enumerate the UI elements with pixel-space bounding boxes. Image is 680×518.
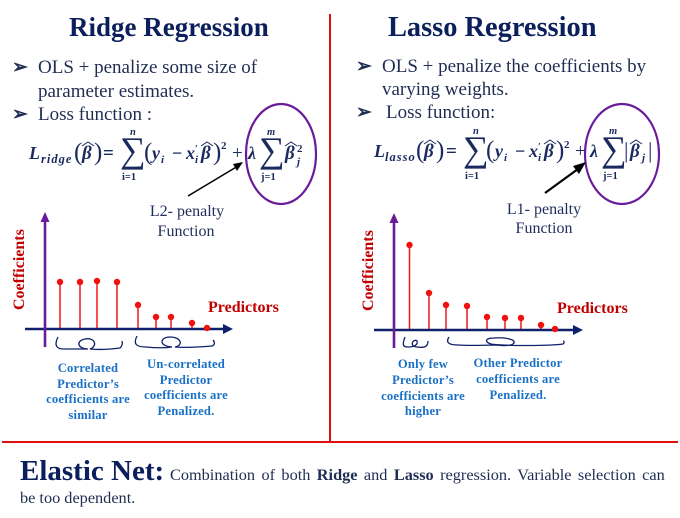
formula: ridge loss: i [195, 154, 199, 166]
divider: vertical red line [329, 14, 331, 441]
formula: lasso loss: L [373, 141, 385, 161]
caption: uncorrelated predictors: Un-correlated [147, 357, 225, 371]
formula: lasso loss: ( [486, 137, 494, 164]
text block: ridge bullets: parameter estimates. [38, 81, 194, 102]
formula: ridge loss: ( [74, 139, 82, 166]
formula: ridge loss: y [150, 143, 161, 163]
callout circle: L2 penalty term [246, 104, 316, 204]
formula: ridge loss: j=1 [260, 172, 276, 183]
text block: lasso bullets: Loss function: [386, 102, 495, 123]
formula: ridge loss: L [28, 143, 40, 163]
formula: ridge loss: ′ [195, 144, 198, 155]
caption: uncorrelated predictors [144, 357, 228, 418]
caption: few predictors higher: Predictor’s [392, 373, 454, 387]
formula: lasso loss: β [629, 141, 640, 162]
text block: L1 penalty function: L1- penalty [507, 201, 581, 218]
text block: L2 penalty function: L2- penalty [150, 203, 224, 220]
x axis: predictors [25, 324, 233, 334]
text block: L2 penalty function [150, 203, 224, 240]
formula: ridge loss: m [267, 127, 275, 138]
arrow: to L2 penalty term [188, 162, 243, 196]
formula: lasso loss: ′ [538, 142, 541, 153]
text block: lasso bullets [356, 56, 647, 123]
y axis: coefficients [390, 213, 398, 348]
formula: ridge loss: ) [94, 139, 102, 166]
formula: ridge loss: ∑ [259, 130, 285, 170]
arrow: to L1 penalty term [545, 162, 586, 193]
text block: ridge bullets: ➢ [12, 104, 29, 125]
y axis: coefficients [40, 212, 50, 347]
axis label: Predictors: Predictors [557, 300, 628, 317]
formula: lasso loss: ( [416, 137, 424, 164]
formula: lasso loss: λ [589, 141, 598, 161]
formula: lasso loss: | [648, 138, 652, 163]
brace: few predictors [403, 337, 428, 347]
text block: ridge bullets: ➢ [12, 57, 29, 78]
caption: few predictors higher: coefficients are [381, 389, 465, 403]
formula: lasso loss: i [538, 152, 542, 164]
formula: ridge loss: 2 [221, 140, 227, 152]
chart: lasso coefficients [360, 213, 628, 348]
formula: lasso loss: j [640, 152, 646, 164]
formula: ridge loss: ( [144, 139, 152, 166]
brace: correlated [56, 337, 122, 349]
caption: few predictors higher: Only few [398, 357, 449, 371]
text block: elastic net [20, 455, 665, 507]
formula: lasso loss: ∑ [463, 129, 489, 169]
formula: lasso loss: β [423, 141, 434, 162]
formula: lasso loss: | [624, 138, 628, 163]
formula: lasso loss: + [575, 141, 586, 162]
formula: ridge loss [28, 127, 303, 183]
caption: correlated predictors: coefficients are [46, 392, 130, 406]
dots [406, 242, 558, 332]
caption: other predictors penalized: Penalized. [490, 388, 546, 402]
formula: lasso loss: ) [436, 137, 444, 164]
formula: lasso loss: β [543, 141, 554, 162]
formula: lasso loss: i [504, 152, 508, 164]
panel: ridge regression [11, 12, 316, 422]
caption: uncorrelated predictors: Predictor [160, 373, 213, 387]
formula: lasso loss: m [609, 126, 617, 137]
heading: Ridge Regression: Ridge Regression [69, 12, 269, 42]
formula: lasso loss: = [446, 141, 457, 162]
brace: uncorrelated [135, 336, 214, 348]
caption: other predictors penalized [474, 356, 563, 402]
formula: ridge loss: + [232, 143, 243, 164]
formula: ridge loss: ridge [41, 152, 72, 166]
formula: lasso loss: − [515, 141, 525, 161]
axis label: Coefficients: Coefficients [11, 229, 28, 310]
formula: ridge loss: ) [213, 139, 221, 166]
dots [57, 278, 210, 331]
formula: ridge loss: i [161, 154, 165, 166]
formula: ridge loss: β [200, 143, 211, 164]
formula: ridge loss: 2 [297, 143, 303, 155]
text block: elastic net: Combination of both Ridge and Lasso regression. Variable selection can [170, 465, 665, 484]
formula: lasso loss: 2 [564, 139, 570, 151]
text block: lasso bullets: ➢ [356, 102, 373, 123]
stems [410, 245, 541, 330]
formula: ridge loss: ∑ [120, 130, 146, 170]
text block: lasso bullets: ➢ [356, 56, 373, 77]
callout circle: L1 penalty term [585, 104, 659, 204]
formula: ridge loss: j [295, 156, 301, 168]
axis label: Coefficients: Coefficients [360, 230, 377, 311]
text block: ridge bullets [12, 57, 258, 125]
stems [60, 281, 192, 329]
text block: elastic net: be too dependent. [20, 488, 135, 507]
formula: ridge loss: β [284, 143, 295, 164]
text block: lasso bullets: OLS + penalize the coefficients by [382, 56, 647, 77]
chart: ridge coefficients [11, 212, 279, 349]
caption: uncorrelated predictors: Penalized. [158, 404, 214, 418]
caption: uncorrelated predictors: coefficients are [144, 388, 228, 402]
caption: correlated predictors: similar [68, 408, 108, 422]
formula: ridge loss: = [103, 143, 114, 164]
text block: L1 penalty function: Function [516, 220, 572, 237]
divider: horizontal red line [2, 441, 678, 443]
axis label: Predictors: Predictors [208, 299, 279, 316]
formula: ridge loss: − [172, 143, 182, 163]
caption: few predictors higher: higher [405, 404, 441, 418]
formula: lasso loss: ∑ [601, 129, 627, 169]
formula: ridge loss: i=1 [122, 172, 136, 183]
brace: other predictors [448, 337, 564, 346]
caption: other predictors penalized: coefficients are [476, 372, 560, 386]
caption: correlated predictors: Predictor’s [57, 377, 119, 391]
formula: ridge loss: λ [247, 143, 256, 163]
caption: correlated predictors [46, 361, 130, 422]
formula: lasso loss: y [493, 141, 504, 161]
formula: lasso loss: ) [556, 137, 564, 164]
formula: lasso loss [373, 126, 652, 182]
formula: ridge loss: β [81, 143, 92, 164]
text block: ridge bullets: Loss function : [38, 104, 152, 125]
formula: lasso loss: j=1 [602, 171, 618, 182]
formula: lasso loss: n [473, 126, 479, 137]
x axis: predictors [374, 325, 583, 335]
formula: lasso loss: x [528, 141, 538, 161]
formula: ridge loss: n [130, 127, 136, 138]
caption: few predictors higher [381, 357, 465, 418]
text block: elastic net: Elastic Net: [20, 455, 164, 487]
caption: correlated predictors: Correlated [58, 361, 118, 375]
formula: lasso loss: i=1 [465, 171, 479, 182]
formula: lasso loss: lasso [385, 150, 416, 164]
caption: other predictors penalized: Other Predictor [474, 356, 563, 370]
text block: L1 penalty function [507, 201, 581, 237]
text block: lasso bullets: varying weights. [382, 79, 509, 100]
panel: lasso regression [356, 12, 659, 418]
formula: ridge loss: x [185, 143, 195, 163]
heading: Lasso Regression: Lasso Regression [388, 12, 597, 43]
text block: L2 penalty function: Function [158, 223, 214, 240]
text block: ridge bullets: OLS + penalize some size of [38, 57, 258, 78]
